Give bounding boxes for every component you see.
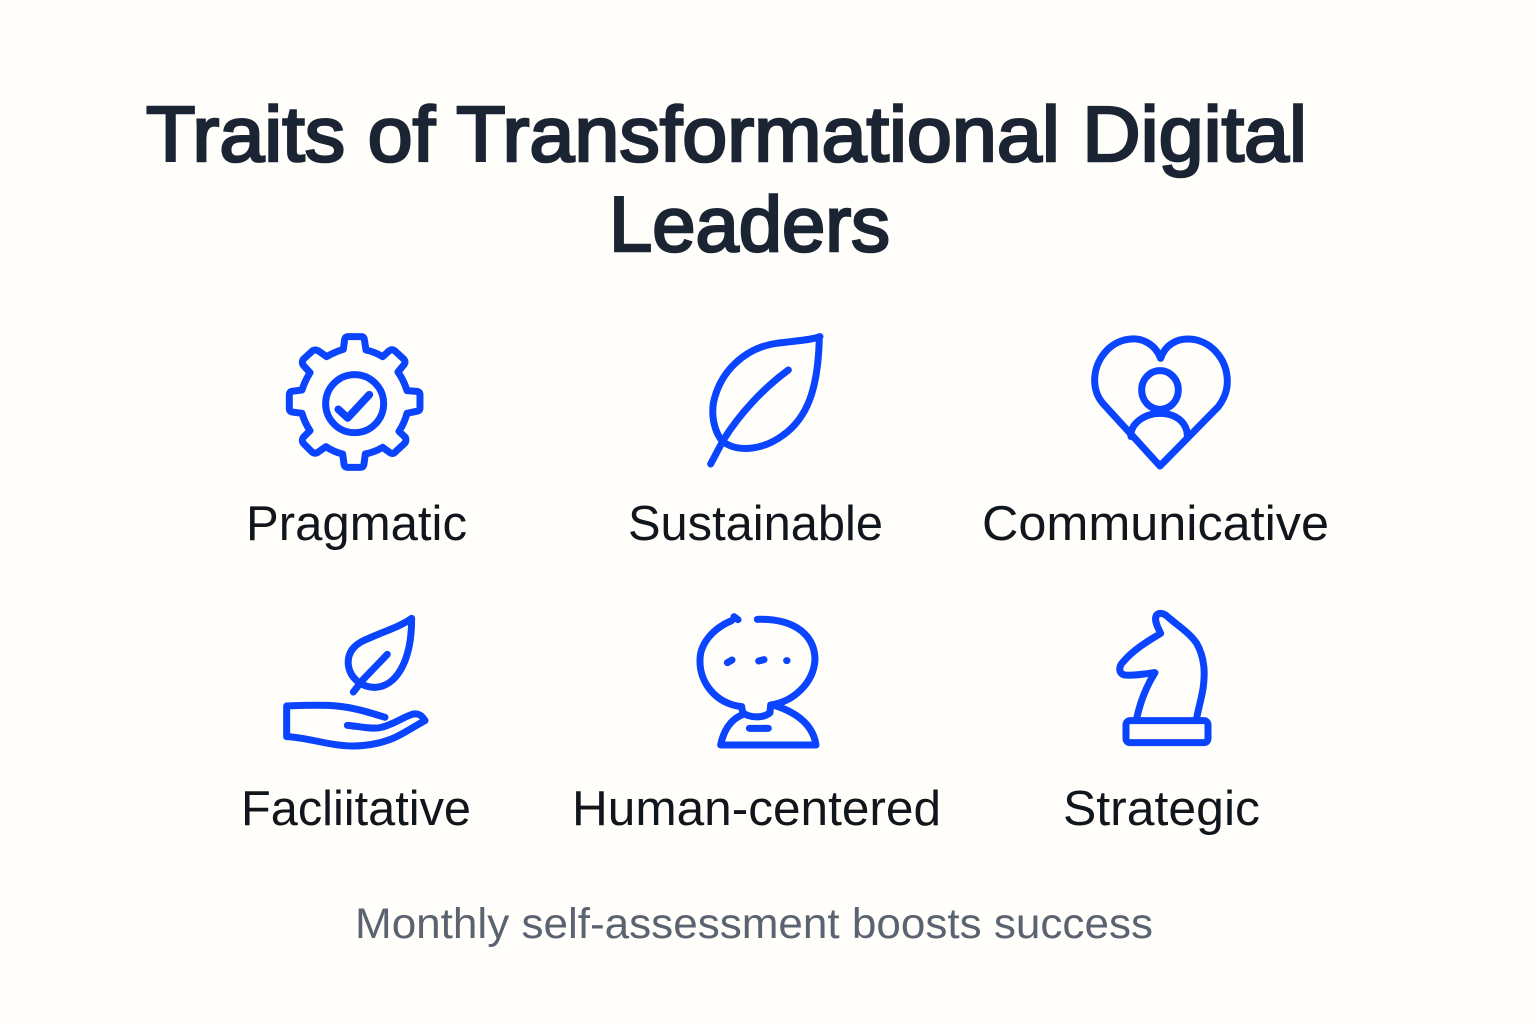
icon: heart with person xyxy=(1095,339,1227,466)
icon: human head with dots xyxy=(700,617,816,745)
icon: hand holding leaf xyxy=(287,618,425,746)
title: Traits of Transformational Digital xyxy=(146,90,1307,178)
label: Human-centered: Human-centered xyxy=(572,782,941,836)
label: Pragmatic: Pragmatic xyxy=(246,497,467,551)
icon: chess knight xyxy=(1120,613,1208,743)
icon: leaf xyxy=(711,337,820,464)
label: Communicative: Communicative xyxy=(982,497,1329,551)
footer note: Monthly self-assessment boosts success xyxy=(355,900,1153,948)
title xyxy=(146,90,1307,268)
icon: gear with check xyxy=(289,337,420,467)
label: Sustainable: Sustainable xyxy=(628,497,883,551)
title: Leaders xyxy=(609,180,890,268)
label: Strategic: Strategic xyxy=(1063,782,1260,836)
label: Facliitative: Facliitative xyxy=(241,782,471,836)
